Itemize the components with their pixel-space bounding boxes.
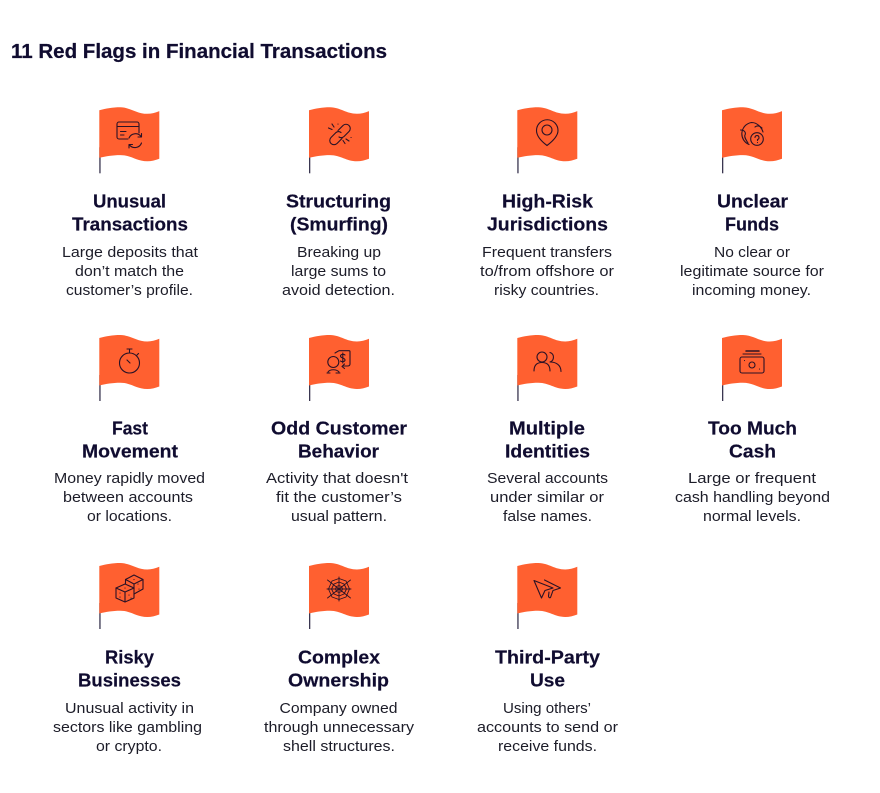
flag: complex ownership: [309, 563, 369, 629]
description: Using others’: [503, 700, 591, 717]
description: don’t match the: [75, 263, 184, 280]
flag: too much cash: [722, 335, 782, 401]
flag: high-risk jurisdictions: [517, 107, 577, 173]
heading: [72, 190, 188, 234]
description: [53, 700, 202, 755]
description: [487, 470, 608, 525]
panel: high-risk jurisdictions: [480, 107, 614, 299]
description: [675, 470, 830, 525]
flag: unusual transactions: [99, 107, 159, 173]
description: accounts to send or: [477, 719, 618, 736]
panel: fast movement: [54, 335, 205, 525]
heading: Transactions: [72, 214, 188, 234]
description: Breaking up: [297, 244, 381, 261]
description: sectors like gambling: [53, 719, 202, 736]
description: cash handling beyond: [675, 489, 830, 506]
description: legitimate source for: [680, 263, 824, 280]
heading: Complex: [298, 646, 381, 668]
flag: multiple identities: [517, 335, 577, 401]
description: through unnecessary: [264, 719, 415, 736]
heading: Fast: [112, 418, 148, 438]
heading: [708, 418, 797, 462]
panel: risky businesses: [53, 563, 202, 755]
description: fit the customer’s: [276, 489, 402, 506]
panel: third-party use: [477, 563, 618, 755]
description: [62, 244, 199, 299]
icon: dice: [116, 575, 143, 602]
panel: structuring: [282, 107, 395, 299]
description: Company owned: [280, 700, 398, 717]
description: incoming money.: [692, 282, 811, 299]
icon: paper planes: [534, 580, 560, 598]
icon: broken chain link: [328, 124, 351, 145]
description: large sums to: [291, 263, 386, 280]
description: Frequent transfers: [482, 244, 612, 261]
heading: Cash: [729, 440, 776, 462]
panel: too much cash: [675, 335, 830, 525]
icon: spider web: [327, 577, 351, 601]
heading: Businesses: [78, 670, 181, 690]
description: avoid detection.: [282, 282, 395, 299]
panel: multiple identities: [487, 335, 608, 525]
title: 11 Red Flags in Financial Transactions: [11, 40, 387, 63]
flag: odd customer behavior: [309, 335, 369, 401]
description: Large deposits that: [62, 244, 199, 261]
description: under similar or: [490, 489, 604, 506]
heading: Use: [530, 670, 565, 690]
icon: globe with question mark: [740, 122, 763, 145]
heading: [78, 646, 181, 690]
heading: Funds: [725, 214, 779, 234]
description: or locations.: [87, 508, 172, 525]
description: receive funds.: [498, 738, 597, 755]
heading: Odd Customer: [271, 418, 407, 438]
heading: Identities: [505, 440, 590, 462]
panel: odd customer behavior: [266, 335, 409, 525]
heading: [717, 190, 788, 234]
heading: Structuring: [286, 190, 391, 212]
panel: unclear funds: [680, 107, 824, 299]
heading: [505, 418, 590, 462]
flag: third-party use: [517, 563, 577, 629]
icon: two people: [534, 352, 561, 372]
heading: [288, 646, 389, 690]
description: or crypto.: [96, 738, 162, 755]
icon: person with dollar speech bubble: [327, 351, 350, 373]
flag: structuring: [309, 107, 369, 173]
description: shell structures.: [283, 738, 395, 755]
description: [480, 244, 614, 299]
panel: unusual transactions: [62, 107, 199, 299]
description: usual pattern.: [291, 508, 387, 525]
heading: [495, 646, 601, 690]
description: customer’s profile.: [66, 282, 193, 299]
heading: (Smurfing): [290, 214, 388, 234]
description: [477, 700, 618, 755]
description: Large or frequent: [688, 470, 817, 487]
description: [264, 700, 415, 755]
description: Activity that doesn't: [266, 470, 409, 487]
flag: risky businesses: [99, 563, 159, 629]
icon: stack of cash: [740, 351, 764, 373]
description: risky countries.: [494, 282, 599, 299]
heading: Movement: [82, 440, 178, 462]
description: between accounts: [63, 489, 193, 506]
description: false names.: [503, 508, 592, 525]
heading: [271, 418, 407, 462]
heading: Too Much: [708, 418, 797, 438]
heading: Unclear: [717, 190, 788, 212]
heading: Multiple: [509, 418, 585, 438]
description: to/from offshore or: [480, 263, 614, 280]
description: [282, 244, 395, 299]
heading: Ownership: [288, 670, 389, 690]
heading: Risky: [105, 646, 155, 668]
heading: Behavior: [298, 440, 379, 462]
heading: Unusual: [93, 190, 166, 212]
description: [54, 470, 205, 525]
flag: fast movement: [99, 335, 159, 401]
icon: card with refresh arrows: [117, 122, 142, 148]
description: Unusual activity in: [65, 700, 194, 717]
description: normal levels.: [703, 508, 801, 525]
description: No clear or: [714, 244, 790, 261]
heading: Jurisdictions: [487, 214, 608, 234]
description: [266, 470, 409, 525]
heading: [82, 418, 178, 462]
heading: Third-Party: [495, 646, 601, 668]
heading: [487, 190, 608, 234]
icon: location pin: [536, 120, 558, 146]
description: [680, 244, 824, 299]
panel: complex ownership: [264, 563, 415, 755]
description: Several accounts: [487, 470, 608, 487]
icon: stopwatch: [120, 349, 140, 373]
heading: High-Risk: [502, 190, 594, 212]
heading: [286, 190, 391, 234]
description: Money rapidly moved: [54, 470, 205, 487]
flag: unclear funds: [722, 107, 782, 173]
